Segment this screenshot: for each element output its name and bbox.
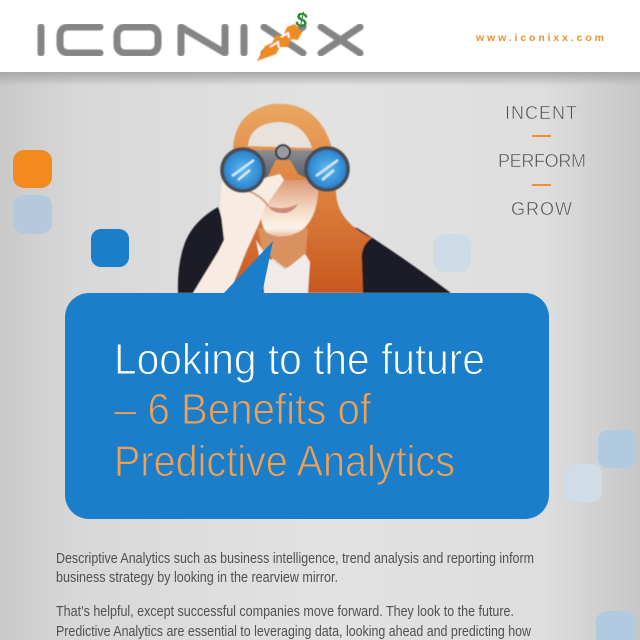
right lens [306, 148, 348, 190]
decorative square: right blue [598, 430, 636, 468]
decorative square: orange [13, 150, 52, 188]
body text [56, 551, 534, 640]
binocular focus knob [276, 145, 290, 159]
decorative square: right pale [563, 464, 602, 502]
tagline word: incent: INCENT [505, 103, 577, 123]
bubble tail [223, 241, 273, 294]
body text: Predictive Analytics are essential to leveraging data, looking ahead and predicting how [56, 624, 531, 640]
forehead [248, 122, 312, 148]
speech bubble [65, 241, 549, 519]
bubble heading: Predictive Analytics [114, 437, 455, 486]
lens reflections [232, 160, 338, 180]
tagline [498, 103, 586, 219]
face [258, 180, 318, 237]
lips [268, 204, 298, 213]
bubble heading [114, 335, 485, 486]
body text: business strategy by looking in the rearview mirror. [56, 570, 338, 586]
tagline word: grow: GROW [511, 199, 572, 219]
bubble heading: Looking to the future [114, 335, 485, 384]
decorative square: blue [91, 229, 129, 267]
logo: dollar sign: $ [294, 8, 310, 33]
website address: www.iconixx.com [475, 32, 604, 44]
decorative square: pale blue left [13, 195, 52, 234]
decorative square: bottom right [596, 611, 636, 640]
body text: Descriptive Analytics such as business intelligence, trend analysis and reporting inform [56, 551, 534, 567]
tagline word: perform: PERFORM [498, 151, 586, 171]
neck [258, 228, 308, 268]
left lens [222, 149, 264, 191]
body text: That’s helpful, except successful companies move forward. They look to the future. [56, 604, 514, 620]
logo: ICONIXX wordmark [41, 27, 360, 53]
binocular body [232, 150, 340, 188]
arm and hand [193, 174, 284, 293]
bubble heading: – 6 Benefits of [114, 385, 372, 434]
decorative square: pale blue by photo [433, 234, 471, 272]
header band [0, 0, 640, 86]
hair [222, 104, 372, 293]
bubble body [65, 293, 549, 519]
logo: carrot icon [257, 24, 302, 61]
jacket [178, 207, 451, 293]
blouse [256, 240, 310, 293]
photo: woman with binoculars [178, 104, 451, 293]
